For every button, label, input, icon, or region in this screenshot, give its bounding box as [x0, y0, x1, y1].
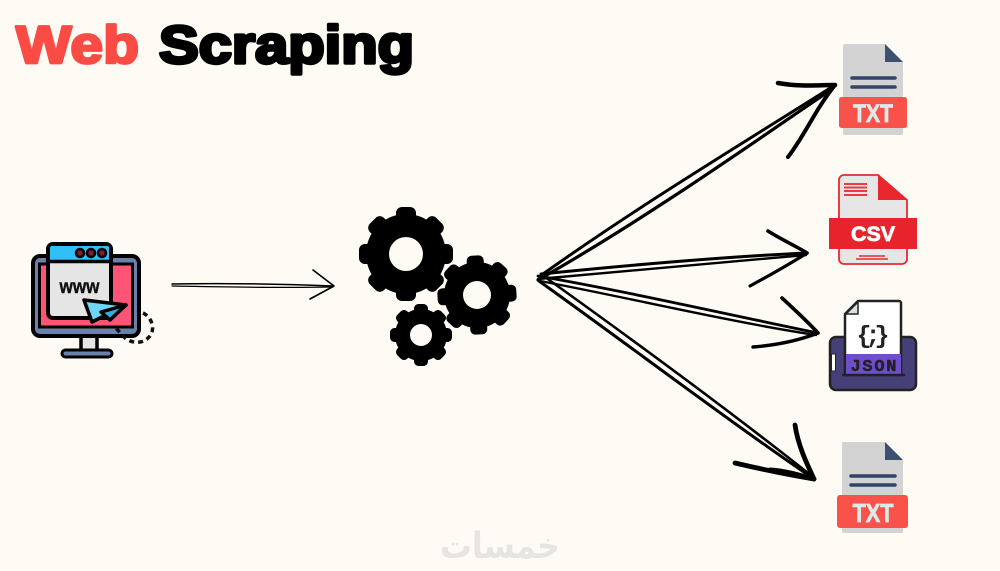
text lines: [852, 78, 895, 87]
page fold: [885, 442, 903, 460]
tray body: [830, 337, 916, 390]
large gear: [359, 207, 453, 301]
footer lines: [856, 256, 888, 259]
arrow: gears to CSV: [538, 231, 807, 286]
monitor frame: [33, 256, 139, 336]
JSON label: JSON: [850, 358, 896, 377]
text lines: [851, 476, 895, 485]
label band: [829, 218, 917, 249]
monitor screen: [40, 264, 132, 327]
www label: www: [59, 277, 100, 298]
icon: JSON file: [830, 301, 916, 390]
label band: [837, 495, 908, 528]
TXT label: TXT: [853, 100, 893, 128]
page fold: [885, 44, 903, 62]
JSON band: [846, 354, 901, 375]
medium gear gap: [436, 254, 518, 336]
page fold: [878, 175, 907, 200]
icon: TXT file top: [839, 44, 907, 135]
tray slot: [832, 354, 836, 371]
page: [842, 442, 903, 533]
arrow: gears to JSON: [538, 276, 818, 347]
page: [843, 44, 903, 135]
page fold: [846, 302, 858, 314]
medium gear: [437, 255, 517, 335]
title word: Web: Web: [16, 16, 139, 75]
header lines: [844, 184, 867, 195]
TXT label: TXT: [852, 498, 894, 528]
page: [839, 175, 907, 264]
arrow: gears to top TXT: [538, 83, 835, 280]
icon: TXT file bottom: [837, 442, 908, 533]
page: [845, 301, 901, 375]
monitor stand: [62, 336, 112, 357]
braces: {;}: [856, 322, 890, 351]
title word: Scraping: Scraping: [159, 16, 414, 75]
label band: [839, 97, 907, 128]
icon: CSV file: [829, 175, 917, 264]
small gear: [390, 304, 452, 366]
watermark: خمسات: [440, 526, 560, 567]
arrow: gears to bottom TXT: [539, 277, 814, 479]
arrow: website to gears: [172, 270, 334, 299]
tray lip: [842, 374, 905, 376]
dashed circle: [115, 313, 153, 342]
title: [16, 16, 414, 75]
icon: website on monitor: [33, 244, 153, 357]
cursor plane: [84, 300, 126, 322]
icon: gears: [359, 207, 518, 366]
CSV label: CSV: [851, 223, 895, 246]
